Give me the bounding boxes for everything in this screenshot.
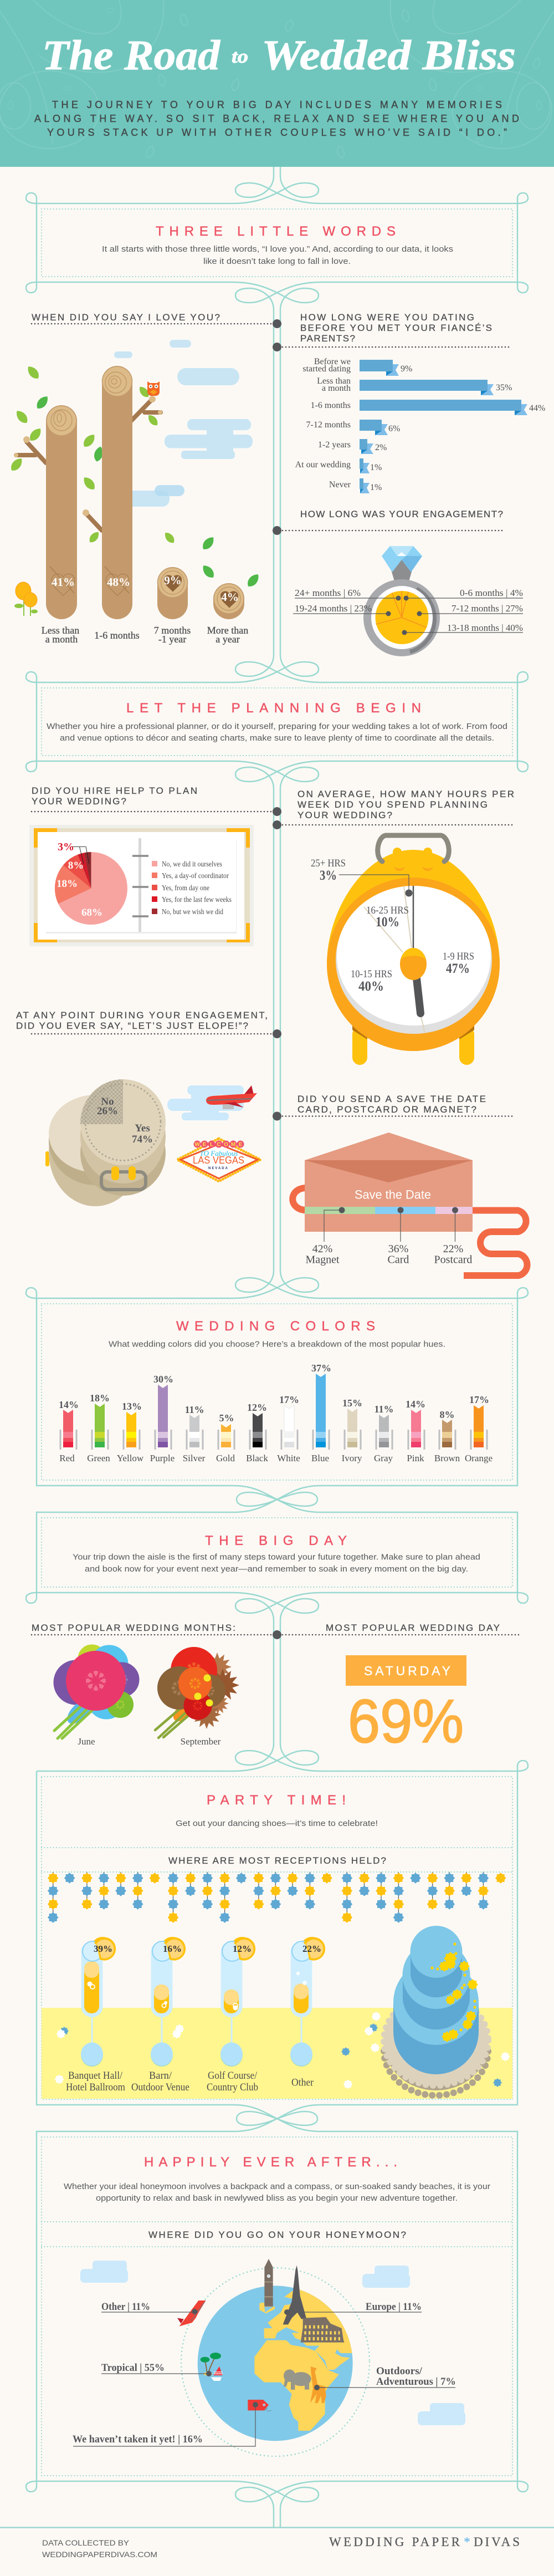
intro text: YOURS STACK UP WITH OTHER COUPLES WHO’VE SAID “I DO.” — [47, 127, 507, 138]
bar values: 17% — [279, 1394, 299, 1405]
icon: suitcase pie: No — [101, 1096, 114, 1108]
clock labels: 10% — [376, 915, 399, 930]
icon: airplane and clouds — [167, 1085, 257, 1120]
bar names: Blue — [311, 1453, 329, 1463]
bar values: 15% — [342, 1397, 362, 1409]
pie legend — [152, 860, 232, 916]
log labels — [42, 625, 248, 645]
panel: met the parents chart: PARENTS? — [300, 333, 355, 344]
icon: owl — [147, 381, 160, 396]
glass labels: Country Club — [207, 2082, 258, 2093]
envelope callouts: 42% — [312, 1243, 332, 1255]
panel: party time heading: PARTY TIME! — [207, 1793, 346, 1808]
icon: giraffe — [310, 2366, 326, 2403]
clock labels: 47% — [446, 961, 470, 976]
icon: diamond ring — [363, 546, 440, 656]
pie legend: No, but we wish we did — [162, 908, 223, 916]
panel: the big day heading: Your trip down the aisle is the first of many steps toward your future together. Make sure to plan ahead — [73, 1552, 480, 1562]
bar names: White — [277, 1453, 300, 1463]
bar values: 1% — [370, 483, 382, 492]
chart: champagne glasses — [66, 1937, 325, 2093]
ring labels: 0-6 months | 4% — [460, 588, 523, 598]
bar labels: Never — [329, 480, 351, 489]
log labels: 7 months — [154, 625, 191, 636]
ring labels: 19-24 months | 23% — [295, 603, 372, 614]
intro text: THE JOURNEY TO YOUR BIG DAY INCLUDES MANY MEMORIES — [52, 99, 502, 110]
globe callouts: Europe | 11% — [366, 2301, 422, 2313]
panel: three little words heading: like it doesn’t take long to fall in love. — [203, 257, 351, 266]
panel: let the planning begin heading: LET THE PLANNING BEGIN — [126, 701, 421, 716]
glass labels: Outdoor Venue — [131, 2082, 189, 2093]
bar values: 35% — [496, 383, 512, 392]
icon: wedding cake — [384, 1926, 488, 2095]
globe callouts — [73, 2301, 456, 2446]
globe callouts: We haven’t taken it yet! | 16% — [73, 2434, 203, 2445]
intro text — [34, 99, 519, 138]
panel: met the parents chart — [273, 312, 545, 493]
icon: las vegas sign: LAS VEGAS — [193, 1155, 244, 1166]
glass 39% — [81, 1937, 116, 2067]
log labels: -1 year — [158, 634, 186, 645]
footer source: DATA COLLECTED BY — [42, 2538, 130, 2547]
icon: suitcase pie: 74% — [132, 1134, 153, 1145]
clouds — [80, 2261, 465, 2425]
clock labels: 16-25 HRS — [366, 905, 409, 916]
globe callouts: Tropical | 55% — [101, 2362, 165, 2374]
pie chart: 18% — [57, 878, 78, 890]
panel: met the parents chart: BEFORE YOU MET YOUR FIANCÉ’S — [300, 323, 492, 333]
bar names: Silver — [183, 1453, 206, 1463]
bar labels: Before we — [314, 357, 351, 366]
globe callouts: Outdoors/ — [376, 2365, 423, 2377]
bar values: 12% — [247, 1402, 267, 1413]
pie chart — [55, 841, 127, 925]
bar names: Yellow — [117, 1453, 144, 1463]
bar values: 17% — [469, 1394, 489, 1405]
bar names: Ivory — [342, 1453, 362, 1463]
panel: hired help pie: YOUR WEDDING? — [32, 796, 126, 807]
clock labels: 1-9 HRS — [443, 951, 474, 962]
icon: june bouquet — [54, 1649, 134, 1747]
icon: september bouquet: September — [181, 1736, 221, 1747]
pie chart: 68% — [81, 907, 102, 919]
title — [42, 32, 516, 79]
intro text: ALONG THE WAY. SO SIT BACK, RELAX AND SEE WHERE YOU AND — [34, 113, 519, 124]
panel: the big day heading — [73, 1533, 480, 1574]
envelope callouts: Postcard — [434, 1254, 472, 1266]
panel: wedding colors heading — [109, 1319, 445, 1349]
log labels: More than — [207, 625, 248, 636]
footer logo: DIVAS — [474, 2535, 520, 2549]
leaves and branches — [8, 364, 261, 589]
planner frame — [29, 825, 254, 946]
panel: hired help pie — [29, 785, 281, 946]
panel: popular day — [283, 1623, 521, 1756]
panel: happily ever after heading: opportunity to relax and bask in newlywed bliss as you begin your new adventure together. — [96, 2194, 458, 2203]
glass 12% — [220, 1937, 255, 2067]
clock labels: 3% — [320, 868, 337, 883]
pie legend: No, we did it ourselves — [162, 860, 222, 869]
panel: save the date envelope: CARD, POSTCARD OR MAGNET? — [297, 1104, 476, 1115]
bar names: Black — [246, 1453, 268, 1463]
panel: engagement length ring — [273, 509, 523, 656]
title: to — [232, 47, 248, 67]
footer logo — [329, 2535, 520, 2549]
log labels: 1-6 months — [94, 630, 140, 641]
panel: save the date envelope — [273, 1094, 527, 1276]
bar labels: At our wedding — [295, 460, 351, 470]
panel: the big day heading: and book now for your event next year—and remember to soak in every moment on the big day. — [85, 1564, 468, 1574]
bar names: Gold — [216, 1453, 235, 1463]
log labels: a year — [216, 634, 240, 645]
bar labels: a month — [322, 384, 351, 393]
glass 22% — [290, 1937, 325, 2067]
bar chart: log heights — [46, 366, 244, 619]
panel: elope suitcase — [16, 1010, 281, 1206]
panel: the big day heading: THE BIG DAY — [205, 1533, 347, 1548]
panel: happily ever after heading: HAPPILY EVER AFTER... — [144, 2155, 397, 2170]
icon: las vegas sign: WELCOME — [194, 1142, 243, 1147]
glass labels: Barn/ — [149, 2070, 172, 2082]
glass labels: Other — [291, 2077, 314, 2089]
panel: three little words heading: It all starts with those three little words, “I love you.” And, according to our data, it looks — [102, 244, 453, 254]
clock labels: 25+ HRS — [311, 858, 346, 869]
panel: planning hours clock: WEEK DID YOU SPEND PLANNING — [297, 799, 488, 810]
bar names: Red — [59, 1453, 75, 1463]
saturday badge: SATURDAY — [364, 1664, 450, 1678]
bar chart: log heights: 4% — [221, 590, 239, 604]
icon: palm island and boat — [201, 2353, 223, 2381]
saturday badge — [346, 1655, 466, 1686]
bar values — [59, 1363, 489, 1424]
icon: june bouquet: June — [78, 1736, 95, 1747]
icon: suitcase pie: 26% — [97, 1105, 118, 1117]
icon: plane — [177, 2300, 206, 2327]
panel: elope suitcase: DID YOU EVER SAY, “LET’S JUST ELOPE!”? — [16, 1021, 248, 1031]
pie legend: Yes, for the last few weeks — [162, 896, 232, 904]
panel: when did you say i love you: WHEN DID YOU SAY I LOVE YOU? — [32, 312, 220, 323]
big number: 69% — [348, 1687, 464, 1756]
icon: elephant — [284, 2369, 311, 2390]
bar names: Purple — [150, 1453, 175, 1463]
bar values: 5% — [219, 1412, 234, 1424]
header banner — [0, 0, 554, 167]
chart: honeymoon globe — [73, 2259, 456, 2456]
panel: popular months: MOST POPULAR WEDDING MONTHS: — [32, 1623, 235, 1633]
bar labels: started dating — [302, 364, 351, 374]
bar values: 2% — [375, 443, 387, 452]
icon: garland of flowers — [48, 1872, 506, 1923]
bar values: 6% — [388, 424, 400, 433]
icon: eiffel tower — [283, 2266, 306, 2324]
panel: three little words heading — [102, 224, 453, 266]
panel: save the date envelope: DID YOU SEND A SAVE THE DATE — [297, 1094, 486, 1104]
bar values: 14% — [406, 1399, 425, 1410]
ribbon bars — [360, 360, 527, 493]
glass labels: Golf Course/ — [208, 2070, 258, 2082]
panel: planning hours clock: YOUR WEDDING? — [297, 810, 392, 820]
bar values: 11% — [184, 1404, 204, 1415]
log labels: Less than — [42, 625, 79, 636]
envelope callouts — [305, 1207, 472, 1266]
icon: luggage tag — [248, 2400, 271, 2411]
bar names: Orange — [465, 1453, 493, 1463]
footer logo: * — [464, 2535, 470, 2549]
bar names: Gray — [374, 1453, 393, 1463]
clock labels: 10-15 HRS — [351, 968, 392, 980]
glass labels — [66, 2070, 314, 2093]
bar labels — [295, 357, 351, 489]
icon: las vegas sign: NEVADA — [208, 1167, 228, 1170]
pie chart: 3% — [58, 841, 74, 853]
bar labels: Less than — [317, 376, 351, 386]
panel: happily ever after heading: Whether your ideal honeymoon involves a backpack and a compass, or sun-soaked sandy beaches, it is your — [64, 2182, 490, 2191]
panel: planning hours clock: ON AVERAGE, HOW MANY HOURS PER — [297, 789, 514, 799]
icon: alarm clock — [327, 835, 500, 1065]
bar names: Pink — [407, 1453, 424, 1463]
ring labels: 24+ months | 6% — [295, 588, 361, 598]
panel: popular day: MOST POPULAR WEDDING DAY — [326, 1623, 500, 1633]
bar values: 14% — [59, 1399, 79, 1410]
envelope callouts: 36% — [388, 1243, 408, 1255]
bar values: 8% — [440, 1409, 454, 1420]
footer logo: WEDDING PAPER — [329, 2535, 460, 2549]
icon: big ben — [264, 2259, 273, 2307]
bar values: 9% — [401, 364, 412, 374]
bar values: 13% — [122, 1401, 142, 1412]
panel: let the planning begin heading — [47, 701, 507, 743]
panel: three little words heading: THREE LITTLE WORDS — [156, 224, 396, 239]
bar chart: log heights: 9% — [164, 574, 182, 587]
icon: ribbon — [293, 1188, 527, 1276]
bar chart: log heights: 41% — [52, 575, 75, 589]
bar values — [370, 364, 545, 492]
panel: party time heading: WHERE ARE MOST RECEPTIONS HELD? — [168, 1855, 386, 1866]
footer source: WEDDINGPAPERDIVAS.COM — [42, 2550, 157, 2559]
bar names — [59, 1453, 493, 1463]
pie legend: Yes, a day-of coordinator — [162, 872, 229, 880]
panel: hired help pie: DID YOU HIRE HELP TO PLAN — [32, 785, 197, 796]
icon: las vegas sign: TO Fabulous — [200, 1149, 238, 1157]
glass 16% — [151, 1937, 186, 2067]
panel: met the parents chart: HOW LONG WERE YOU DATING — [300, 312, 474, 323]
ring labels: 7-12 months | 27% — [452, 603, 523, 614]
panel: when did you say i love you — [8, 312, 281, 645]
glass 22%: 22% — [302, 1944, 321, 1954]
party floor — [42, 2008, 512, 2099]
glass labels: Banquet Hall/ — [68, 2070, 123, 2082]
clock labels — [311, 858, 474, 994]
log labels: a month — [45, 634, 78, 645]
icon: suitcase pie — [45, 1079, 166, 1206]
panel: popular months — [32, 1623, 281, 1747]
chart: wedding colors bars — [59, 1363, 493, 1463]
envelope callouts: Magnet — [305, 1254, 340, 1266]
panel: wedding colors heading: WEDDING COLORS — [176, 1319, 375, 1334]
tube rails — [60, 1430, 487, 1450]
bar names: Brown — [434, 1453, 460, 1463]
clouds — [114, 340, 253, 507]
bar labels: 7-12 months — [306, 420, 351, 430]
panel: party time heading: Get out your dancing shoes—it’s time to celebrate! — [176, 1819, 378, 1828]
icon: envelope: Save the Date — [355, 1187, 431, 1202]
bar labels: 1-6 months — [311, 401, 351, 410]
panel: wedding colors heading: What wedding colors did you choose? Here’s a breakdown of the most popular hues. — [109, 1339, 445, 1349]
panel: elope suitcase: AT ANY POINT DURING YOUR ENGAGEMENT, — [16, 1010, 268, 1021]
icon: colosseum — [301, 2317, 345, 2343]
panel: engagement length ring: HOW LONG WAS YOUR ENGAGEMENT? — [300, 509, 503, 519]
panel: happily ever after heading — [64, 2155, 490, 2240]
bar values: 37% — [311, 1363, 331, 1374]
petals — [55, 2012, 510, 2089]
panel: let the planning begin heading: Whether you hire a professional planner, or do it yourself, preparing for your wedding takes a lot of work. From food — [47, 722, 507, 731]
bar values: 18% — [90, 1392, 110, 1404]
glass 12%: 12% — [233, 1944, 252, 1954]
glass 16%: 16% — [163, 1944, 182, 1954]
ring labels — [293, 588, 523, 635]
icon: las vegas sign — [177, 1139, 260, 1181]
bar chart: log heights: 48% — [107, 575, 130, 589]
globe callouts: Adventurous | 7% — [376, 2376, 456, 2388]
icon: september bouquet — [155, 1652, 239, 1747]
title: Wedded Bliss — [261, 32, 516, 79]
ring labels: 13-18 months | 40% — [447, 623, 523, 633]
panel: let the planning begin heading: and venue options to décor and seating charts, make sure to leave plenty of time to coordinate all the details. — [60, 733, 494, 743]
glass labels: Hotel Ballroom — [66, 2082, 125, 2093]
panel: party time heading — [168, 1793, 386, 1866]
bar values: 1% — [370, 463, 382, 472]
icon: envelope — [305, 1133, 473, 1232]
footer source — [42, 2538, 157, 2559]
envelope callouts: Card — [388, 1254, 409, 1266]
bar values: 30% — [153, 1374, 173, 1385]
panel: happily ever after heading: WHERE DID YOU GO ON YOUR HONEYMOON? — [148, 2230, 406, 2240]
icon: suitcase pie: Yes — [135, 1123, 150, 1134]
bar values: 44% — [529, 404, 545, 413]
title: The Road — [42, 32, 220, 79]
pie legend: Yes, from day one — [162, 884, 209, 892]
bar labels: 1-2 years — [318, 440, 351, 450]
envelope callouts: 22% — [443, 1243, 463, 1255]
icon: flowers — [14, 582, 38, 616]
clock labels: 40% — [358, 979, 384, 994]
glass 39%: 39% — [94, 1944, 112, 1954]
bar values: 11% — [374, 1404, 394, 1415]
bar names: Green — [87, 1453, 110, 1463]
panel: planning hours clock — [273, 789, 514, 1065]
globe callouts: Other | 11% — [101, 2301, 150, 2313]
pie chart: 8% — [68, 860, 84, 871]
